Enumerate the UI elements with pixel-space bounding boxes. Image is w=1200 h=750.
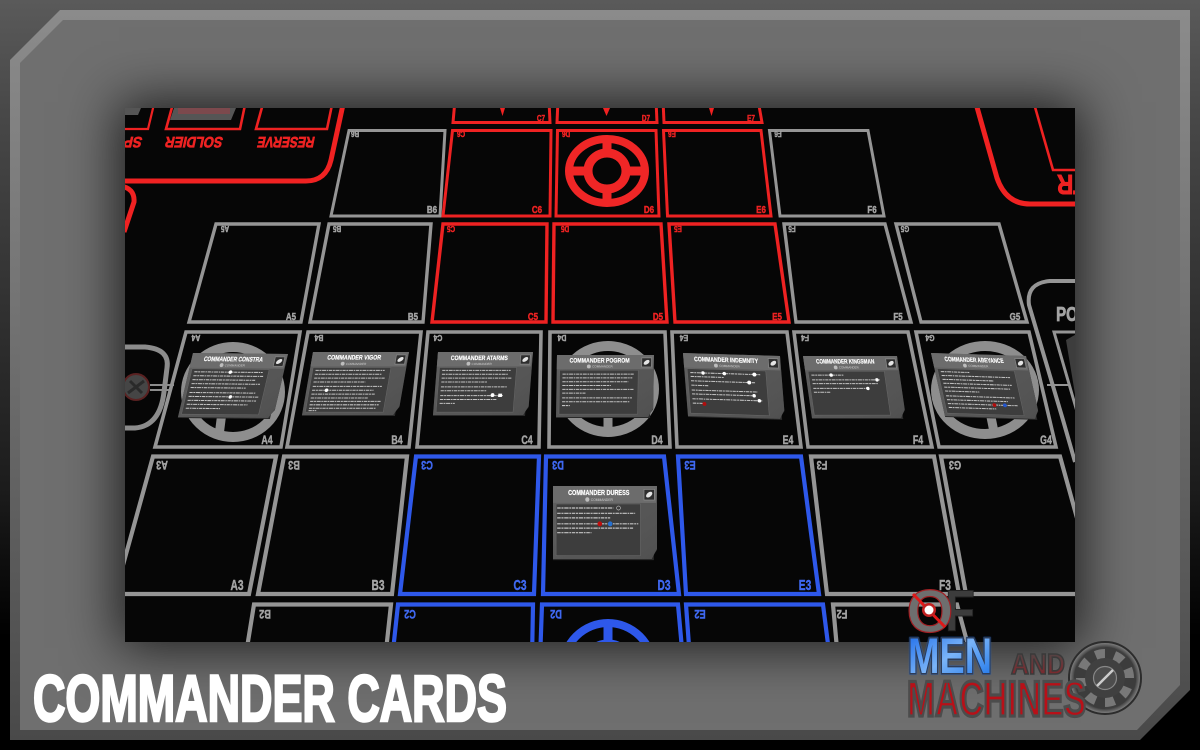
card: Commander Pogrom [556, 355, 654, 418]
row 4 cells: C4 [521, 435, 533, 447]
card: Commander Abeyance [931, 353, 1040, 420]
row 3 cells: D3 [657, 576, 671, 594]
row 4 cells: E4 [783, 435, 794, 447]
title: COMMANDER CARDS [33, 661, 507, 735]
game board [125, 108, 1075, 642]
logo word: MACHINES: MACHINES [907, 671, 1086, 727]
row 2 cells: F2 [836, 607, 847, 619]
top-left red player zone: RESERVE [256, 134, 316, 150]
card: Commander Kingsman: COMMANDER KINGSMAN [816, 359, 875, 366]
row 2 cells: E2 [694, 607, 706, 619]
row 5 cells: F5 [788, 224, 796, 234]
card: Commander Atarms: COMMANDER [471, 362, 493, 366]
row 4 cells: A4 [191, 333, 200, 343]
row 3 cells: C3 [421, 458, 433, 470]
row 5 cells: C5 [528, 311, 538, 322]
row 5 cells: C5 [447, 224, 455, 234]
row 6 cells: F6 [867, 204, 877, 215]
card: Commander Vigor: COMMANDER [345, 362, 367, 366]
red row 7 cells: D7 [642, 113, 650, 123]
row 3 cells: B3 [371, 576, 385, 594]
row 3 cells: A3 [230, 576, 244, 594]
row 3 cells: B3 [288, 458, 300, 470]
row 4 cells: G4 [925, 333, 935, 343]
row 4 cells: D4 [651, 435, 663, 447]
card: Commander Constra [178, 353, 288, 419]
row 5 cells: B5 [333, 224, 341, 234]
row 3 cells: E3 [799, 576, 811, 594]
row 6 cells: D6 [644, 204, 654, 215]
row 5 cells: G5 [1010, 311, 1020, 322]
top-left red player zone: SP [122, 133, 144, 149]
row 5 cells: F5 [893, 311, 903, 322]
row 4 cells: E4 [679, 333, 688, 343]
row 4 cells: B4 [314, 333, 323, 343]
card: Commander Abeyance: COMMANDER ABEYANCE [944, 356, 1005, 365]
row 4 cells: D4 [557, 333, 566, 343]
card: Commander Pogrom: COMMANDER POGROM [569, 358, 630, 365]
row 6 cells: E6 [756, 204, 766, 215]
row 4 cells: A4 [261, 435, 273, 447]
row 3 cells: A3 [156, 458, 168, 470]
row 5 cells: D5 [561, 224, 569, 234]
red row 7 cells [453, 100, 762, 123]
left gray zone with token [120, 347, 174, 428]
red row 7 cells: C7 [537, 113, 545, 123]
top-left red player zone: SOLDIER [164, 133, 225, 150]
row 5 cells: G5 [901, 224, 909, 234]
icon: gray emblem G4 [936, 346, 1034, 434]
row 3 cells: C3 [513, 576, 527, 594]
row 6 cells: B6 [351, 129, 359, 139]
icon: blue target D2 [566, 619, 650, 642]
row 3 cells: F3 [939, 576, 951, 594]
row 5 cells: E5 [772, 311, 782, 322]
logo word: OF: O [907, 578, 953, 645]
card: Commander Indemnity: COMMANDER [719, 364, 741, 369]
top-right red player zone [974, 108, 1075, 206]
icon: gray emblem A4 [186, 347, 280, 437]
logo word: AND: AND [1011, 649, 1065, 681]
game board backdrop [125, 108, 1075, 642]
icon: gear [1069, 642, 1141, 714]
row 5 cells: A5 [286, 311, 296, 322]
logo word: OF [907, 578, 975, 645]
top-left red player zone [120, 100, 344, 232]
card: Commander Indemnity: COMMANDER INDEMNITY [694, 356, 759, 365]
row 3 cells: G3 [949, 458, 961, 470]
right gray power zone: PO [1056, 303, 1078, 326]
row 6 cells [331, 129, 884, 216]
row 3 cells: F3 [816, 458, 827, 470]
icon: red target D6 [569, 139, 645, 203]
row 3 cells: D3 [552, 458, 564, 470]
row 6 cells: E6 [668, 129, 676, 139]
card: Commander Constra: COMMANDER [224, 363, 246, 368]
row 4 cells: G4 [1040, 435, 1052, 447]
row 6 cells: C6 [532, 204, 542, 215]
row 3 cells [115, 456, 1098, 594]
card: Commander Abeyance: COMMANDER [968, 364, 990, 369]
row 5 cells: B5 [408, 311, 418, 322]
row 5 cells: D5 [653, 311, 663, 322]
row 4 cells: B4 [391, 435, 403, 447]
row 2 cells: C2 [404, 607, 416, 619]
row 6 cells: F6 [774, 129, 782, 139]
row 2 cells [246, 602, 968, 642]
row 3 cells: E3 [684, 458, 696, 470]
logo word: OF: F [945, 579, 975, 644]
card: Commander Indemnity [683, 353, 785, 420]
card: Commander Duress [553, 486, 657, 560]
row 4 cells: C4 [433, 333, 442, 343]
card: Commander Vigor [302, 352, 409, 416]
row 5 cells: A5 [221, 224, 229, 234]
card: Commander Duress: COMMANDER [591, 498, 613, 502]
card: Commander Atarms: COMMANDER ATARMS [451, 355, 508, 362]
card: Commander Kingsman: COMMANDER [839, 366, 860, 370]
row 6 cells: C6 [457, 129, 465, 139]
card: Commander Atarms [433, 352, 533, 416]
card: Commander Kingsman [803, 356, 906, 419]
top-right red player zone: TR [1057, 168, 1087, 199]
card: Commander Pogrom: COMMANDER [592, 365, 614, 369]
row 6 cells: B6 [427, 204, 437, 215]
row 2 cells: D2 [550, 607, 562, 619]
row 6 cells: D6 [562, 129, 570, 139]
card: Commander Vigor: COMMANDER VIGOR [327, 355, 382, 362]
row 4 cells [155, 332, 1056, 447]
logo word: MEN: MEN [908, 628, 992, 684]
card: Commander Constra: COMMANDER CONSTRA [203, 356, 264, 364]
row 5 cells [189, 224, 1027, 322]
row 5 cells: E5 [674, 224, 682, 234]
right gray power zone [1029, 281, 1080, 462]
icon: gray emblem D4 [562, 346, 654, 432]
red row 7 cells: E7 [747, 113, 755, 123]
row 4 cells: F4 [913, 435, 923, 447]
row 4 cells: F4 [800, 333, 809, 343]
row 2 cells: B2 [259, 607, 271, 619]
card: Commander Duress: COMMANDER DURESS [568, 489, 630, 497]
